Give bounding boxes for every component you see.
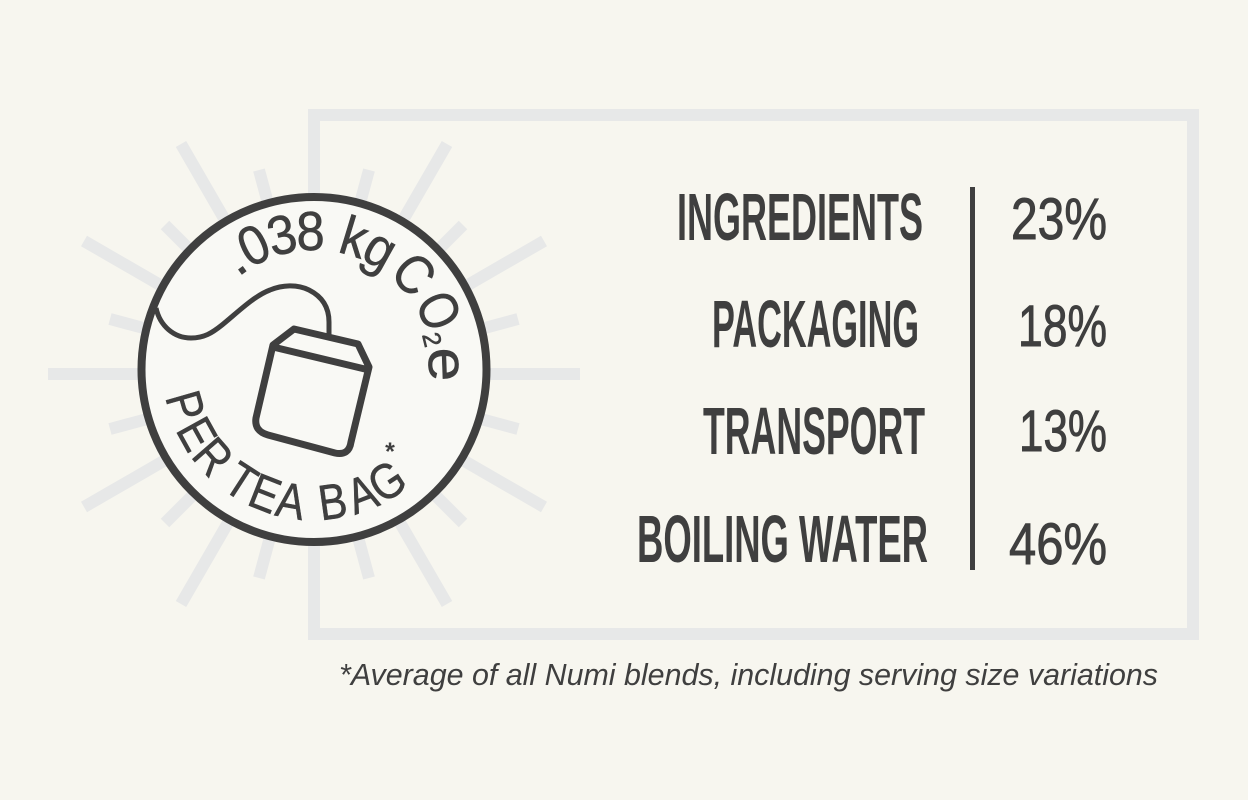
curved label: PER TEA BAG: G [358, 449, 416, 514]
curved label: .038 kg CO2e: 0 [228, 212, 280, 279]
curved label: PER TEA BAG: T [215, 451, 267, 512]
percentages [1009, 187, 1107, 577]
curved label: PER TEA BAG: P [155, 385, 216, 427]
label: transport: TRANSPORT [703, 394, 925, 469]
value: ingredients: 23% [1011, 187, 1107, 252]
label: ingredients: INGREDIENTS [677, 180, 923, 255]
curved label: PER TEA BAG: B [315, 472, 351, 531]
asterisk: * [385, 438, 395, 466]
curved label: .038 kg CO2e: g [353, 215, 408, 283]
value: boiling water: 46% [1009, 512, 1107, 577]
curved label: PER TEA BAG: E [166, 408, 228, 460]
curved label: .038 kg CO2e: k [333, 205, 376, 271]
divider [970, 187, 975, 570]
curved label: PER TEA BAG: R [182, 427, 244, 487]
curved label: .038 kg CO2e [208, 201, 478, 382]
label: packaging: PACKAGING [712, 287, 919, 362]
curved label: .038 kg CO2e: . [208, 228, 257, 287]
curved label: .038 kg CO2e: O [404, 282, 475, 340]
category labels [637, 180, 928, 577]
curved label: PER TEA BAG: A [339, 463, 385, 525]
curved label: .038 kg CO2e: e [416, 346, 478, 382]
curved label: .038 kg CO2e: C [380, 240, 449, 308]
footnote: *Average of all Numi blends, including serving size variations [339, 657, 1158, 692]
curved label: .038 kg CO2e: 8 [296, 201, 325, 263]
panel: breakdown frame [314, 115, 1193, 634]
badge: carbon per tea bag [142, 197, 486, 542]
badge circle [142, 197, 486, 542]
label: boiling water: BOILING WATER [637, 502, 928, 577]
curved label: .038 kg CO2e: 3 [261, 202, 303, 269]
value: packaging: 18% [1018, 294, 1107, 359]
curved label: .038 kg CO2e: 2 [416, 330, 447, 350]
value: transport: 13% [1019, 399, 1107, 464]
icon: tea bag string [156, 286, 329, 338]
curved label: PER TEA BAG: E [242, 462, 288, 525]
icon: sun rays [48, 109, 580, 640]
curved label: PER TEA BAG [155, 385, 416, 531]
curved label: PER TEA BAG: A [272, 471, 310, 531]
icon: tea bag [256, 329, 369, 454]
